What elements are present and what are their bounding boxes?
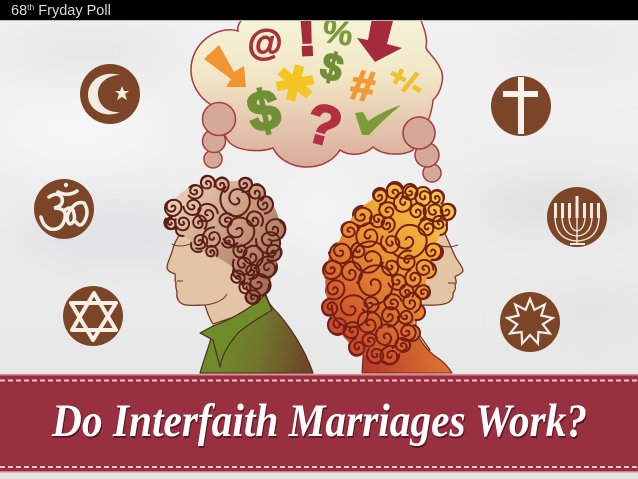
icon: menorah [547, 187, 607, 247]
icon: star of David [63, 286, 123, 346]
symbol: check mark [355, 105, 401, 135]
man collar [200, 295, 272, 367]
icon: cross [491, 76, 551, 136]
poll label: th [27, 2, 35, 12]
poll label: 68 [11, 3, 27, 19]
thought bubbles right [403, 117, 441, 182]
thought cloud [191, 1, 442, 167]
man figure [163, 175, 313, 373]
woman figure [319, 182, 463, 373]
icon: orange arrow [204, 45, 246, 87]
icon: nine-pointed star [500, 292, 560, 352]
icon: om [34, 179, 94, 239]
symbol: question mark: ? [299, 90, 349, 160]
woman face details [441, 245, 458, 283]
symbol: plus minus: +/- [383, 58, 430, 104]
man face [167, 225, 270, 324]
woman face [390, 222, 463, 350]
symbol: asterisk [274, 61, 316, 105]
man hair [163, 175, 289, 306]
thought bubbles left [202, 102, 236, 168]
man shirt [200, 298, 313, 373]
woman hair [319, 182, 455, 365]
symbol: hash: # [347, 60, 378, 111]
man face details [172, 244, 227, 305]
poll label: Fryday Poll [34, 3, 111, 19]
icon: red arrow down [357, 18, 402, 62]
symbol: percent: % [320, 12, 355, 54]
banner [0, 374, 638, 472]
symbol: small dollar: $ [316, 45, 347, 91]
woman dress [362, 325, 452, 373]
icon: crescent and star [80, 64, 140, 124]
symbol: large dollar: $ [242, 76, 285, 144]
symbol: exclamation: ! [295, 1, 318, 69]
top bar [0, 0, 638, 21]
symbol: at sign: @ [247, 22, 283, 63]
